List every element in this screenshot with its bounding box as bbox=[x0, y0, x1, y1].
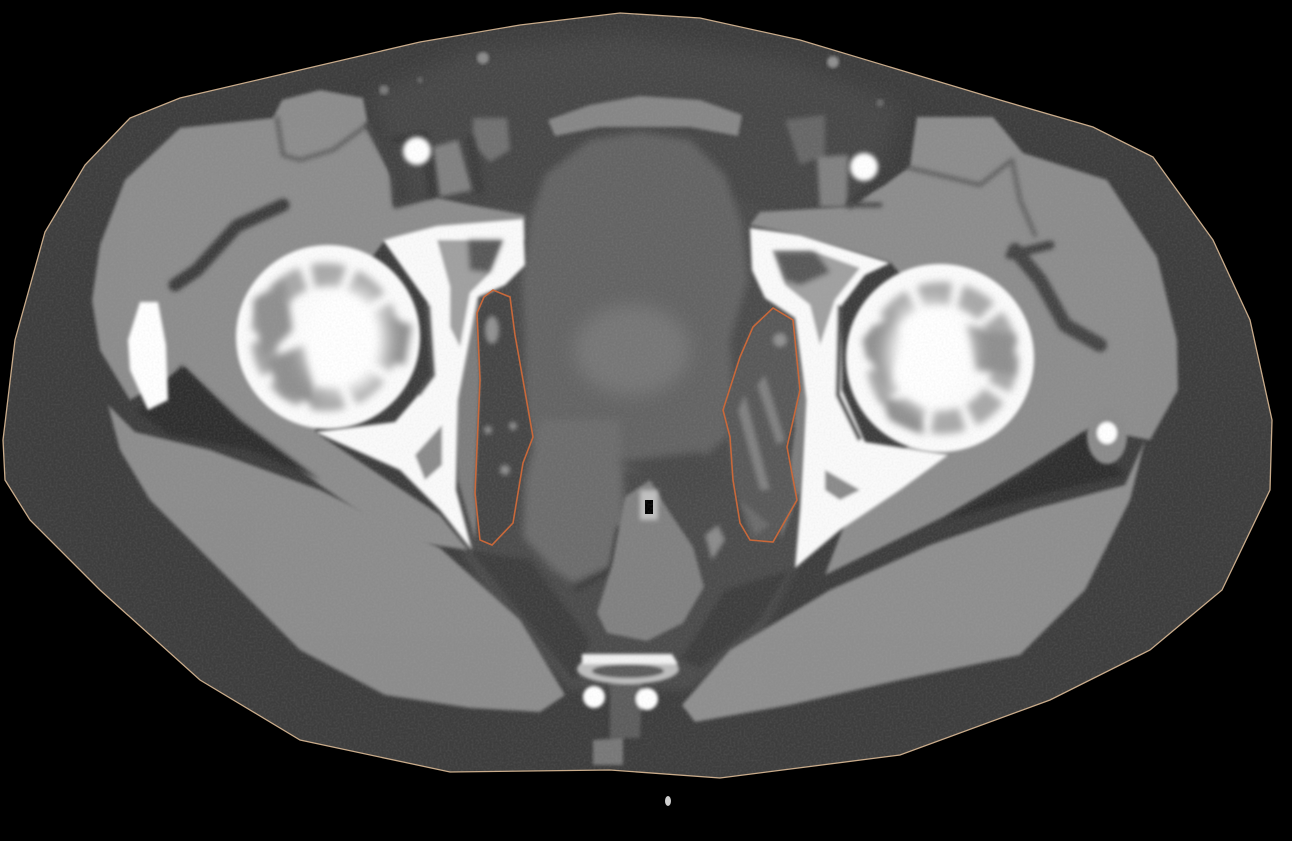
left greater trochanter bbox=[128, 302, 168, 410]
left femoral artery bbox=[403, 137, 431, 165]
right thigh and hip muscle mass bbox=[750, 117, 1178, 575]
left acetabular cavity bbox=[437, 240, 503, 347]
gluteal muscle left bbox=[108, 405, 565, 712]
right contour outline bbox=[723, 308, 800, 542]
gluteal muscle right bbox=[682, 440, 1145, 722]
ischial fat wedges bbox=[138, 365, 1125, 682]
obturator muscles bbox=[456, 295, 806, 540]
right ischium cavity bbox=[825, 470, 860, 500]
right medial thigh muscles bbox=[785, 115, 848, 207]
bladder and central pelvis bbox=[522, 132, 748, 641]
coccyx bbox=[577, 654, 679, 765]
table artifact bbox=[665, 796, 671, 806]
pelvic vessels bbox=[484, 316, 787, 535]
perivesical fat right bbox=[723, 308, 800, 542]
fat planes between left muscles bbox=[175, 118, 480, 285]
gap between right bone and femur bbox=[838, 305, 860, 440]
right pelvic bone bbox=[750, 228, 948, 568]
left cavity dark part bbox=[468, 240, 503, 272]
perirectal vessels bbox=[705, 525, 725, 560]
left thigh and hip muscle mass bbox=[92, 90, 525, 550]
dark band above rectum bbox=[617, 452, 730, 500]
gap between left bone and femur bbox=[418, 305, 433, 395]
left pelvic bone bbox=[315, 219, 525, 550]
central pelvic soft tissue bbox=[440, 200, 820, 690]
rectus abdominis bbox=[548, 96, 742, 136]
right femoral head bbox=[846, 264, 1034, 452]
left ischium cavity bbox=[415, 425, 442, 480]
left medial thigh muscles bbox=[433, 118, 510, 197]
crescent around prostatic tissue bbox=[575, 527, 620, 590]
enhancing central tissue bbox=[574, 305, 690, 395]
right cavity dark part bbox=[775, 252, 830, 285]
fat planes between right muscles bbox=[848, 160, 1100, 345]
right acetabular cavity bbox=[772, 250, 860, 345]
right femoral artery bbox=[850, 153, 878, 181]
rectum bbox=[597, 480, 704, 641]
bladder bbox=[522, 132, 748, 470]
left contour outline bbox=[475, 290, 533, 545]
perivesical fat left bbox=[475, 291, 533, 545]
anterior fat and superficial vessels bbox=[370, 35, 900, 230]
right femur cortex bbox=[1087, 408, 1127, 464]
prostatic tissue bbox=[523, 420, 625, 583]
rectal air bbox=[640, 490, 658, 520]
left femoral head bbox=[236, 245, 420, 429]
